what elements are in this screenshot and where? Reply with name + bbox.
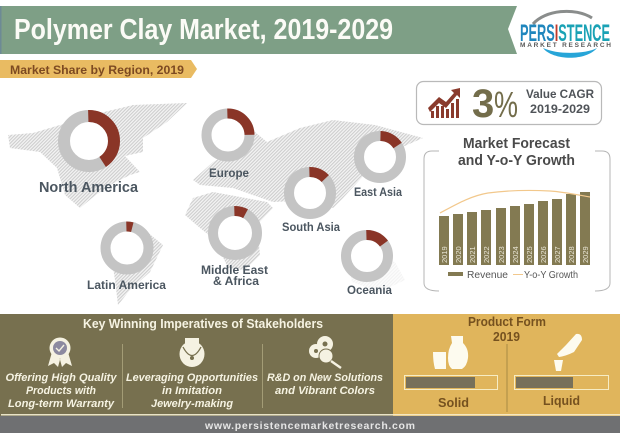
- chart heading: Market Forecast: [463, 136, 570, 152]
- chart legend: Revenue: [467, 270, 508, 281]
- icon: solid clay pots: [433, 336, 468, 369]
- year labels: 2024: [511, 246, 520, 263]
- panel: market forecast chart: [424, 136, 610, 291]
- year labels: 2026: [539, 246, 548, 263]
- panel: key winning imperatives: Key Winning Imperatives of Stakeholders: [83, 316, 323, 331]
- CAGR callout: Value CAGR: [526, 87, 594, 101]
- year labels: 2022: [482, 246, 491, 263]
- icon: rising chart arrow: [428, 88, 460, 118]
- panel: product form: 2019: [493, 330, 520, 344]
- donut: South Asia: South Asia: [282, 220, 340, 234]
- donut: Europe: [206, 114, 250, 180]
- chart legend: [448, 270, 578, 281]
- progress bar: solid: [404, 376, 498, 390]
- panel: product form: Product Form: [468, 315, 546, 329]
- footer with website: www.persistencemarketresearch.com: [204, 420, 415, 432]
- bar chart: revenue: [439, 192, 590, 265]
- imperative texts: Long-term Warranty: [8, 398, 115, 410]
- donut: South Asia: [282, 172, 340, 234]
- label: liquid: Liquid: [543, 393, 580, 408]
- donut: North America: [39, 116, 139, 196]
- CAGR callout: 2019-2029: [530, 102, 590, 116]
- value: 3 percent: %: [494, 84, 518, 125]
- chart heading: [458, 136, 575, 169]
- logo: Persistence Market Research: [520, 11, 611, 58]
- imperative texts: in Imitation: [162, 385, 222, 397]
- year labels: 2021: [468, 246, 477, 263]
- year labels: 2020: [454, 246, 463, 263]
- donut: East Asia: [354, 135, 402, 199]
- label: solid: Solid: [438, 395, 469, 410]
- donut: North America: North America: [39, 179, 139, 196]
- imperative texts: Leveraging Opportunities: [126, 372, 258, 384]
- year labels: 2025: [525, 246, 534, 263]
- year labels: 2023: [497, 246, 506, 263]
- chart legend: Y-o-Y Growth: [524, 270, 578, 281]
- donut: Latin America: [87, 226, 166, 292]
- imperative texts: [6, 372, 383, 410]
- imperative texts: and Vibrant Colors: [275, 385, 375, 397]
- logo: Persistence Market Research: MARKET RESEARCH: [520, 42, 611, 49]
- CAGR callout: [416, 82, 602, 126]
- title banner: [0, 6, 517, 54]
- world map: [8, 103, 423, 305]
- section ribbon: market share by region: [0, 60, 197, 78]
- year labels: 2019: [440, 246, 449, 263]
- footer with website: [0, 416, 620, 433]
- value: 3 percent: 3: [472, 82, 494, 126]
- year labels: 2029: [581, 246, 590, 263]
- panel: key winning imperatives: [0, 314, 393, 416]
- donut: Oceania: [346, 235, 392, 297]
- line: year-on-year growth: [440, 190, 590, 213]
- section ribbon: market share by region: Market Share by Region, 2019: [10, 65, 184, 77]
- progress bar: liquid: [514, 376, 608, 390]
- imperative texts: Offering High Quality: [6, 372, 117, 384]
- imperative texts: Products with: [26, 385, 96, 397]
- icon: gears and magnifier: [309, 336, 341, 368]
- icon: liquid bottle pouring: [554, 334, 582, 371]
- donut: Middle East and Africa: [201, 211, 268, 288]
- donut: Middle East and Africa: Middle East: [201, 263, 268, 277]
- year labels: 2028: [567, 246, 576, 263]
- icon: necklace: [180, 338, 204, 367]
- donut: Oceania: Oceania: [347, 283, 392, 297]
- donut: East Asia: East Asia: [354, 185, 402, 199]
- chart heading: and Y-o-Y Growth: [458, 153, 575, 169]
- imperative texts: R&D on New Solutions: [267, 372, 383, 384]
- icon: quality medal: [48, 338, 72, 367]
- donut: Latin America: Latin America: [87, 278, 166, 292]
- title banner: Polymer Clay Market, 2019-2029: [14, 14, 393, 46]
- year labels: [440, 246, 590, 263]
- imperative texts: Jewelry-making: [151, 398, 233, 410]
- year labels: 2027: [553, 246, 562, 263]
- donut: Europe: Europe: [209, 166, 249, 180]
- panel: product form: [393, 314, 620, 416]
- donut: Middle East and Africa: & Africa: [213, 274, 259, 288]
